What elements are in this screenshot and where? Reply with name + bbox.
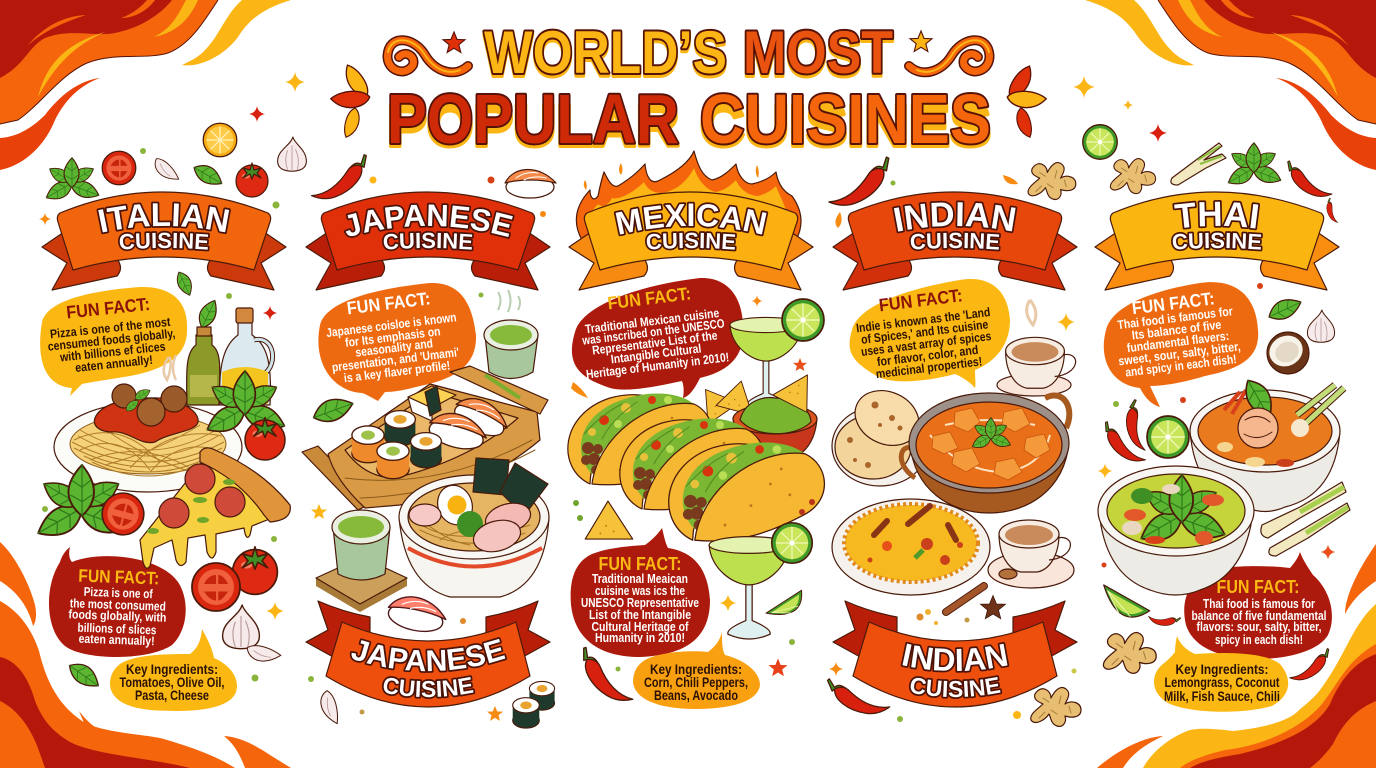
title ornament: right star [910, 31, 932, 51]
title line 1: MOST [743, 19, 893, 86]
fun fact bubble: Thai top: Its balance of five [1131, 318, 1222, 343]
fun fact bubble: Italian bottom: Pizza is one of [84, 585, 154, 601]
fun fact bubble: Thai bottom [1184, 552, 1332, 659]
fun fact bubble: Indian: medicinal properties! [875, 354, 983, 381]
icon: tuna nigiri [385, 592, 449, 636]
fun fact bubble: Indian: uses a vast array of spices [860, 329, 992, 359]
banner: Japanese bottom: CUISINE [382, 675, 476, 699]
flames: bottom-right corner [1097, 544, 1376, 768]
icon: sushi boat [302, 366, 548, 510]
fun fact bubble: Italian top: Pizza is one of the most [49, 315, 172, 341]
fun fact bubble: Mexican bottom: cuisine was ics the [595, 584, 685, 598]
fun fact bubble: Mexican bottom: FUN FACT: [598, 554, 682, 574]
icon: edamame [310, 393, 356, 427]
key ingredients bubble: Mexican: Key Ingredients: [650, 661, 742, 677]
key ingredients bubble: Italian [110, 629, 237, 711]
banner: Italian: CUISINE [118, 230, 210, 252]
banner: Japanese bottom: JAPANESE [350, 637, 508, 673]
icon: olive oil bottles [187, 308, 273, 405]
title ornament: left star [443, 32, 465, 52]
fun fact bubble: Indian [850, 279, 1010, 388]
key ingredients bubble: Mexican: Corn, Chili Peppers, [644, 674, 748, 690]
fun fact bubble: Thai bottom: spicy in each dish! [1215, 633, 1303, 647]
title ornament: splash left [330, 65, 370, 138]
key ingredients bubble: Thai: Milk, Fish Sauce, Chili [1164, 688, 1280, 704]
fun fact bubble: Japanese: Japanese coisloe is known [325, 310, 457, 340]
title line 2: CUISINES [700, 80, 991, 158]
icon: lemongrass [1261, 482, 1350, 556]
fun fact bubble: Mexican top [572, 278, 743, 398]
banner: Thai: CUISINE [1171, 230, 1263, 252]
banner: Japanese top [305, 191, 551, 291]
fun fact bubble: Mexican top: Intangible Cultural [610, 341, 702, 366]
banner: Mexican: MEXICAN [614, 202, 768, 236]
fun fact bubble: Japanese: for Its emphasis on [344, 324, 441, 350]
fun fact bubble: Thai bottom: balance of five fundamental [1192, 609, 1326, 623]
banner: Indian bottom: CUISINE [908, 675, 1002, 699]
fun fact bubble: Thai top: FUN FACT: [1131, 288, 1216, 318]
panel: Thai cuisine [1073, 76, 1351, 712]
bottom garnish: Mexican [576, 594, 795, 702]
fun fact bubble: Thai top [1104, 282, 1258, 407]
fun fact bubble: Italian top [40, 287, 187, 396]
fun fact bubble: Mexican bottom: Traditional Meaican [592, 572, 688, 586]
banner: Mexican: CUISINE [645, 230, 737, 252]
bottom garnish: Japanese [308, 504, 555, 728]
fun fact bubble: Indian: Indie is known as the 'Land [855, 305, 991, 335]
fun fact bubble: Mexican top: FUN FACT: [606, 283, 692, 313]
top garnish: Italian [39, 72, 306, 225]
fun fact bubble: Mexican top: Representative List of the [591, 328, 718, 358]
fun fact bubble: Italian bottom: the most consumed [70, 596, 166, 614]
fun fact bubble: Italian bottom: eaten annually! [78, 632, 155, 648]
icon: garlic and leaf bottom [42, 506, 284, 692]
key ingredients bubble: Mexican: Beans, Avocado [654, 687, 738, 703]
flames: top-right corner [1085, 0, 1376, 170]
fun fact bubble: Italian bottom: billions of slices [77, 621, 157, 637]
panel: Japanese cuisine [301, 154, 557, 729]
fun fact bubble: Japanese: is a key flaver profile! [343, 358, 451, 385]
icon: pizza slice [140, 448, 290, 568]
fun fact bubble: Mexican bottom: UNESCO Representative [581, 596, 699, 610]
key ingredients bubble: Italian: Pasta, Cheese [135, 687, 209, 703]
icon: spaghetti and meatballs [54, 384, 242, 492]
banner: Japanese bottom [305, 600, 551, 708]
icon: basil and sliced tomato left [32, 465, 148, 545]
fun fact bubble: Mexican bottom: Humanity in 2010! [595, 631, 685, 645]
fun fact bubble: Mexican bottom [571, 528, 710, 657]
icon: margarita top [730, 296, 824, 410]
key ingredients bubble: Thai: Lemongrass, Coconut [1164, 674, 1280, 690]
icon: chili and lime left [1098, 397, 1189, 478]
top garnish: Indian [829, 157, 1076, 228]
garnish: leaf, garlic, coconut [1257, 283, 1335, 374]
fun fact bubble: Thai top: and spicy in each dish! [1124, 352, 1237, 380]
fun fact bubble: Mexican top: was inscribed on the UNESCO [581, 316, 725, 348]
title line 2: POPULAR [387, 80, 679, 158]
key ingredients bubble: Mexican [633, 632, 760, 709]
title [330, 19, 1047, 159]
flames behind Mexican banner [576, 151, 801, 240]
banner: Indian top: INDIAN [892, 200, 1018, 234]
leaves and steam: Italian [164, 269, 277, 380]
top garnish: Japanese [312, 155, 556, 217]
fun fact bubble: Japanese: presentation, and 'Umami' [331, 345, 460, 375]
banner: Thai: THAI [1172, 200, 1260, 230]
top garnish: Thai [1073, 76, 1347, 223]
title ornament: left swirl [387, 40, 468, 72]
fun fact bubble: Italian top: eaten annually! [74, 353, 154, 375]
icon: chips and guacamole [691, 375, 823, 462]
fun fact bubble: Italian top: FUN FACT: [65, 294, 151, 323]
banner: Thai [1094, 191, 1340, 291]
icon: tomatoes [192, 547, 277, 611]
icon: biryani plate [832, 499, 990, 595]
icon: margarita bottom [709, 523, 812, 639]
panel: Mexican cuisine [567, 150, 826, 709]
fun fact bubble: Thai top: fundamental flavers: [1126, 329, 1230, 355]
fun fact bubble: Japanese: FUN FACT: [346, 288, 432, 318]
title line 1: WORLD’S [484, 19, 727, 86]
icon: chai cup bottom [988, 520, 1074, 588]
icon: tom yum bowl [1190, 375, 1344, 512]
banner: Indian top: CUISINE [909, 230, 1001, 252]
panel: Indian cuisine [826, 156, 1082, 727]
icon: lime wedge and small chili [1104, 579, 1181, 634]
fun fact bubble: Italian bottom: FUN FACT: [78, 566, 160, 588]
fun fact bubble: Mexican top: Traditional Mexican cuisine [584, 306, 720, 336]
title line 1 [484, 19, 893, 86]
banner: Japanese top: CUISINE [382, 230, 474, 252]
banner: Italian: ITALIAN [96, 202, 231, 234]
fun fact bubble: Italian top: with billions ef clices [58, 339, 166, 365]
banner: Indian bottom [832, 600, 1078, 708]
fun fact bubble: Thai bottom: flavors: sour, salty, bitter, [1196, 620, 1322, 634]
flames: bottom-left corner [0, 542, 291, 768]
fun fact bubble: Mexican top: Heritage of Humanity in 2010! [585, 350, 730, 382]
fun fact bubble: Indian: FUN FACT: [878, 285, 964, 315]
fun fact bubble: Japanese [318, 283, 476, 401]
bottom garnish: Indian [827, 662, 1081, 726]
icon: ramen bowl [399, 458, 549, 597]
title shadow line: CUISINES [700, 92, 991, 159]
fun fact bubble: Indian: for flavor, color, and [876, 343, 979, 369]
title shadow line: MOST [743, 22, 893, 89]
banner: Indian bottom: INDIAN [900, 642, 1010, 673]
fun fact bubble: Italian bottom: foods globally, with [68, 607, 167, 625]
icon: green curry bowl [1098, 466, 1254, 595]
icon: butter chicken karahi [901, 393, 1069, 513]
banner: Mexican [568, 191, 814, 291]
key ingredients bubble: Thai [1154, 636, 1288, 712]
flames: top-left corner [0, 0, 291, 170]
title ornament: right swirl [909, 40, 990, 72]
bottom garnish: Thai [1102, 544, 1336, 680]
key ingredients bubble: Italian: Tomatoes, Olive Oil, [120, 674, 224, 690]
fun fact bubble: Italian top: censumed foods globally, [47, 326, 176, 354]
fun fact bubble: Indian: of Spices,' and Its cuisine [860, 317, 989, 347]
fun fact bubble: Japanese: seasonality and [355, 336, 434, 360]
icon: basil and tomato right of pasta [202, 371, 288, 460]
key ingredients bubble: Thai: Key Ingredients: [1176, 661, 1268, 677]
banner: Italian [41, 191, 287, 291]
icon: cinnamon and star anise [916, 586, 1006, 625]
title shadow line [387, 22, 991, 159]
banner: Japanese top: JAPANESE [344, 202, 514, 239]
fun fact bubble: Thai bottom: Thai food is famous for [1203, 597, 1315, 611]
banner: Indian top [832, 191, 1078, 291]
fun fact bubble: Thai top: Thai food is famous for [1117, 304, 1234, 332]
fun fact bubble: Thai bottom: FUN FACT: [1216, 577, 1300, 597]
icon: chai cup top [997, 300, 1076, 396]
icon: tacos [568, 382, 824, 541]
title ornament: splash right [1007, 66, 1047, 138]
title line 2 [387, 80, 991, 158]
icon: naan stack [832, 380, 928, 486]
key ingredients bubble: Italian: Key Ingredients: [126, 661, 218, 677]
title shadow line: POPULAR [387, 92, 679, 159]
panel: Italian cuisine [37, 72, 346, 711]
fun fact bubble: Thai top: sweet, sour, salty, bitter, [1118, 339, 1241, 368]
fun fact bubble: Mexican bottom: List of the Intangible [589, 608, 691, 622]
icon: matcha cup on tray [316, 510, 407, 612]
fun fact bubble: Italian bottom [49, 547, 186, 657]
fun fact bubble: Mexican bottom: Cultural Heritage of [592, 620, 689, 634]
icon: green tea cup top [478, 290, 538, 378]
title shadow line: WORLD’S [484, 22, 727, 89]
